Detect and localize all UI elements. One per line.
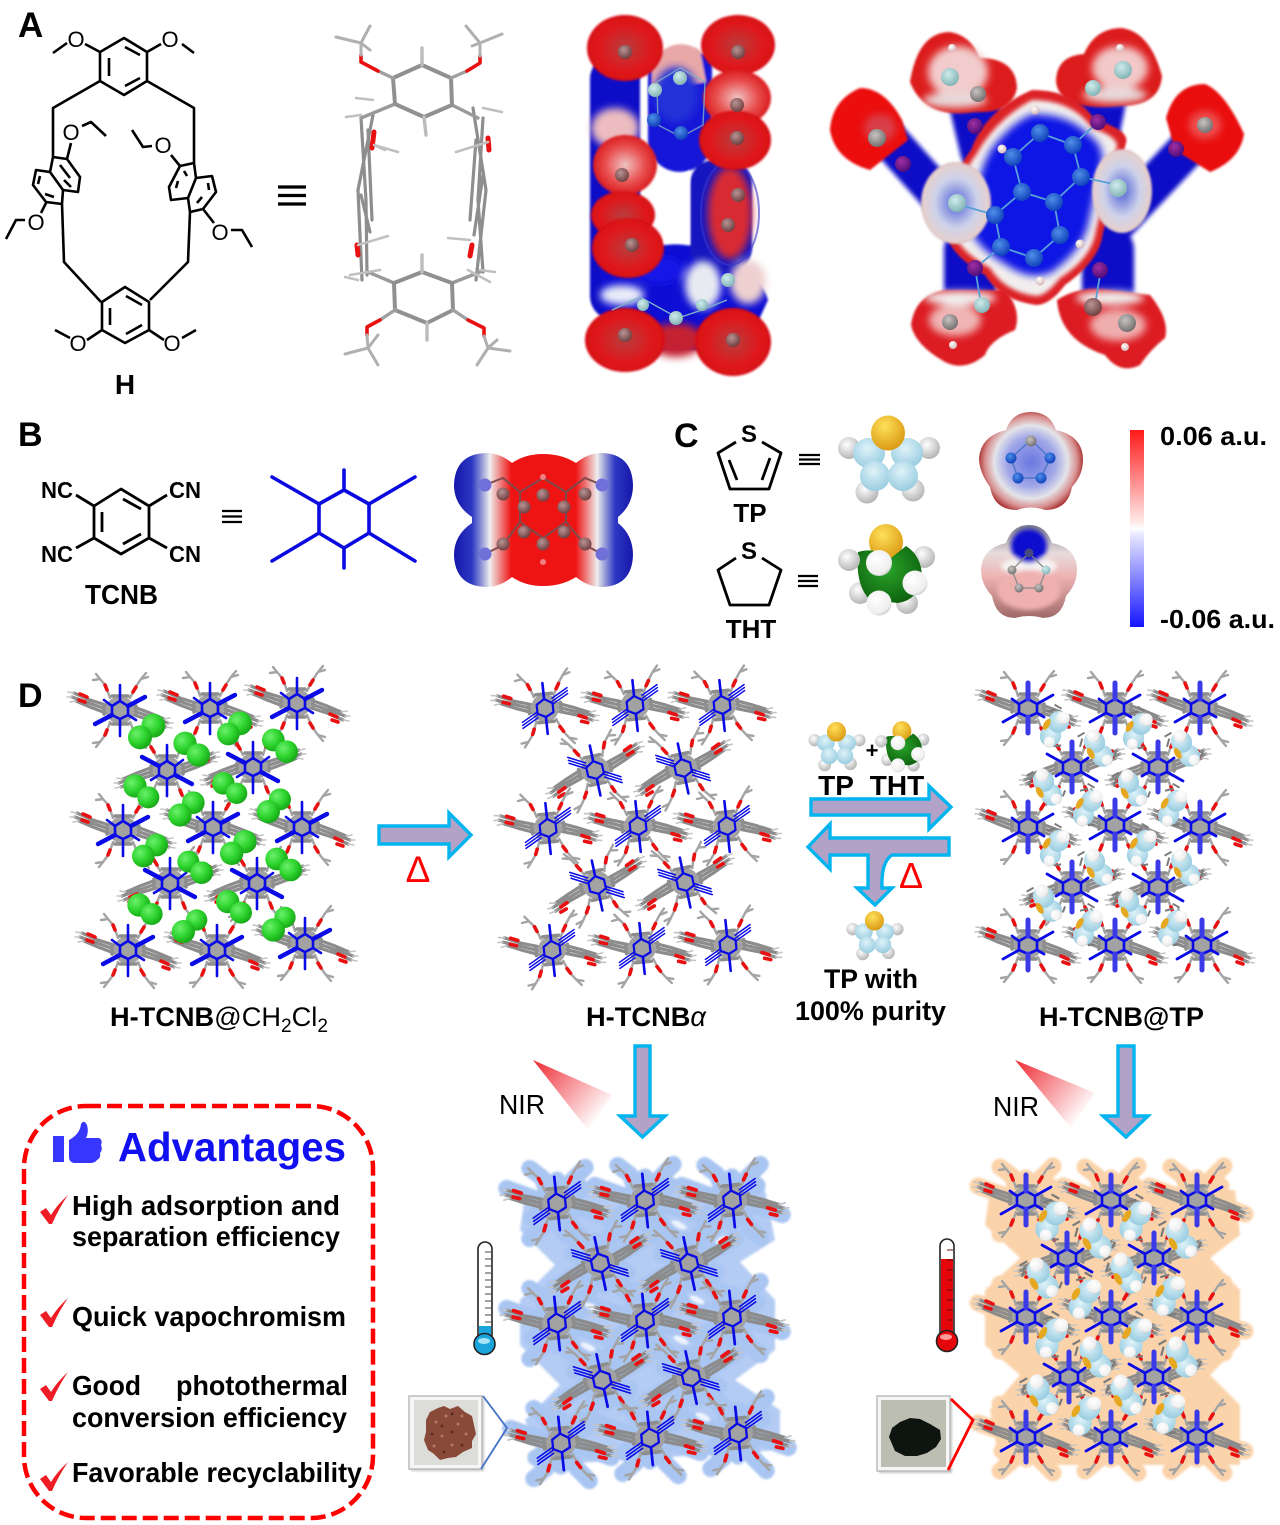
benefit: photothermal conversion: conversion efficiency — [72, 1402, 347, 1433]
crystal packing H-TCNB alpha — [488, 663, 785, 993]
icon: hot thermometer — [936, 1239, 958, 1352]
down arrow TP — [1103, 1046, 1148, 1137]
benefit: vapochromism: Quick vapochromism — [72, 1301, 346, 1332]
chemical structure H: O — [62, 120, 80, 145]
electrostatic potential surface of TP — [979, 412, 1083, 510]
panel label D: D — [18, 677, 43, 715]
heading Advantages: Advantages — [118, 1124, 346, 1170]
space-filling model TP — [838, 416, 940, 504]
chemical structure TCNB: NC — [41, 477, 73, 503]
small TP model — [808, 722, 866, 771]
label THT mixture: THT — [870, 770, 924, 801]
panel label B: B — [18, 416, 43, 454]
equivalence symbol THT — [798, 576, 818, 586]
sample photo: brown powder — [409, 1396, 484, 1471]
benefit: adsorption and separation: separation efficiency — [72, 1221, 340, 1252]
label H: H — [115, 369, 135, 400]
uptake arrow — [811, 786, 951, 829]
label TP: TP — [733, 498, 767, 528]
colour scale minimum label: -0.06 a.u. — [1160, 604, 1275, 634]
NIR beam left — [533, 1060, 612, 1130]
benefit: photothermal conversion — [72, 1370, 348, 1433]
equivalence symbol A — [278, 187, 306, 204]
crystal packing with orange photothermal halo — [973, 1163, 1250, 1475]
chemical structure H: O — [161, 27, 179, 52]
label H-TCNB@CH2Cl2: H-TCNB@CH — [110, 1002, 281, 1032]
down arrow alpha — [620, 1046, 665, 1137]
colour scale maximum label: 0.06 a.u. — [1160, 421, 1267, 451]
small THT model — [875, 721, 929, 772]
label TCNB: TCNB — [85, 579, 158, 610]
blue stick model of TCNB — [272, 470, 415, 568]
label TP mixture: TP — [818, 770, 854, 801]
chemical structure H — [6, 27, 252, 356]
NIR beam right — [1015, 1060, 1095, 1128]
chemical structure TCNB: CN — [169, 541, 201, 567]
benefit: recyclability: Favorable recyclability — [72, 1457, 362, 1488]
electrostatic potential surface, side view — [585, 15, 775, 376]
advantages panel — [24, 1106, 373, 1518]
sample photo: black powder — [877, 1396, 952, 1473]
label TP with 100% purity — [795, 964, 946, 1026]
plus sign: + — [866, 738, 878, 763]
tick marks — [40, 1195, 68, 1491]
label TP with 100% purity: TP with — [824, 964, 918, 994]
benefit: photothermal conversion: Good — [72, 1370, 141, 1401]
NIR label right: NIR — [993, 1091, 1039, 1122]
crystal packing H-TCNB@TP — [975, 671, 1255, 983]
chemical structure H: O — [67, 27, 85, 52]
label THT: THT — [726, 614, 776, 644]
cavity opening — [662, 170, 690, 245]
label H-TCNB@TP: H-TCNB@TP — [1039, 1002, 1204, 1032]
colour scale bar — [1130, 430, 1144, 627]
space-filling model THT — [838, 524, 935, 616]
equivalence symbol TP — [799, 455, 820, 464]
release arrow with branch — [808, 824, 949, 905]
delta symbol: Δ — [406, 849, 430, 890]
NIR label left: NIR — [499, 1089, 545, 1120]
chemical structure H: O — [27, 210, 45, 235]
panel label C: C — [674, 417, 699, 455]
chemical structure H: O — [211, 220, 229, 245]
benefit: adsorption and separation — [72, 1190, 340, 1252]
chemical structure H: O — [163, 331, 181, 356]
chemical structure H: O — [69, 331, 87, 356]
label TP with 100% purity: 100% purity — [795, 996, 946, 1026]
delta symbol release: Δ — [899, 855, 923, 896]
electrostatic potential surface of THT — [981, 525, 1077, 618]
chemical structure TP — [718, 421, 781, 489]
benefit: photothermal conversion: photothermal — [176, 1370, 348, 1401]
crystal packing with blue photothermal halo — [498, 1156, 798, 1488]
label H-TCNB@CH2Cl2: 2 — [281, 1016, 292, 1037]
electrostatic potential surface of TCNB — [454, 453, 633, 587]
chemical structure TCNB — [41, 477, 201, 567]
chemical structure THT — [718, 538, 781, 605]
heating arrow — [379, 813, 471, 857]
chemical structure H: O — [154, 133, 172, 158]
icon: cold thermometer — [474, 1242, 495, 1354]
chemical structure THT: S — [741, 538, 757, 565]
benefit: adsorption and separation: High adsorption and — [72, 1190, 340, 1221]
purified TP model — [846, 911, 904, 960]
label H-TCNB alpha: H-TCNBα — [586, 1002, 708, 1032]
label H-TCNB@CH2Cl2: 2 — [317, 1016, 328, 1037]
stick model of H — [336, 26, 510, 365]
chemical structure TCNB: NC — [41, 541, 73, 567]
chemical structure TCNB: CN — [169, 477, 201, 503]
equivalence symbol B — [222, 511, 242, 522]
callout lines from brown powder — [481, 1396, 507, 1469]
electrostatic potential surface, top view — [830, 28, 1244, 368]
icon: thumbs up — [53, 1122, 102, 1163]
panel label A: A — [18, 6, 43, 45]
chemical structure TP: S — [741, 421, 757, 448]
crystal packing H-TCNB@CH2Cl2 — [67, 666, 358, 988]
label H-TCNB@CH2Cl2: Cl — [292, 1002, 317, 1032]
callout lines from black powder — [948, 1399, 973, 1470]
